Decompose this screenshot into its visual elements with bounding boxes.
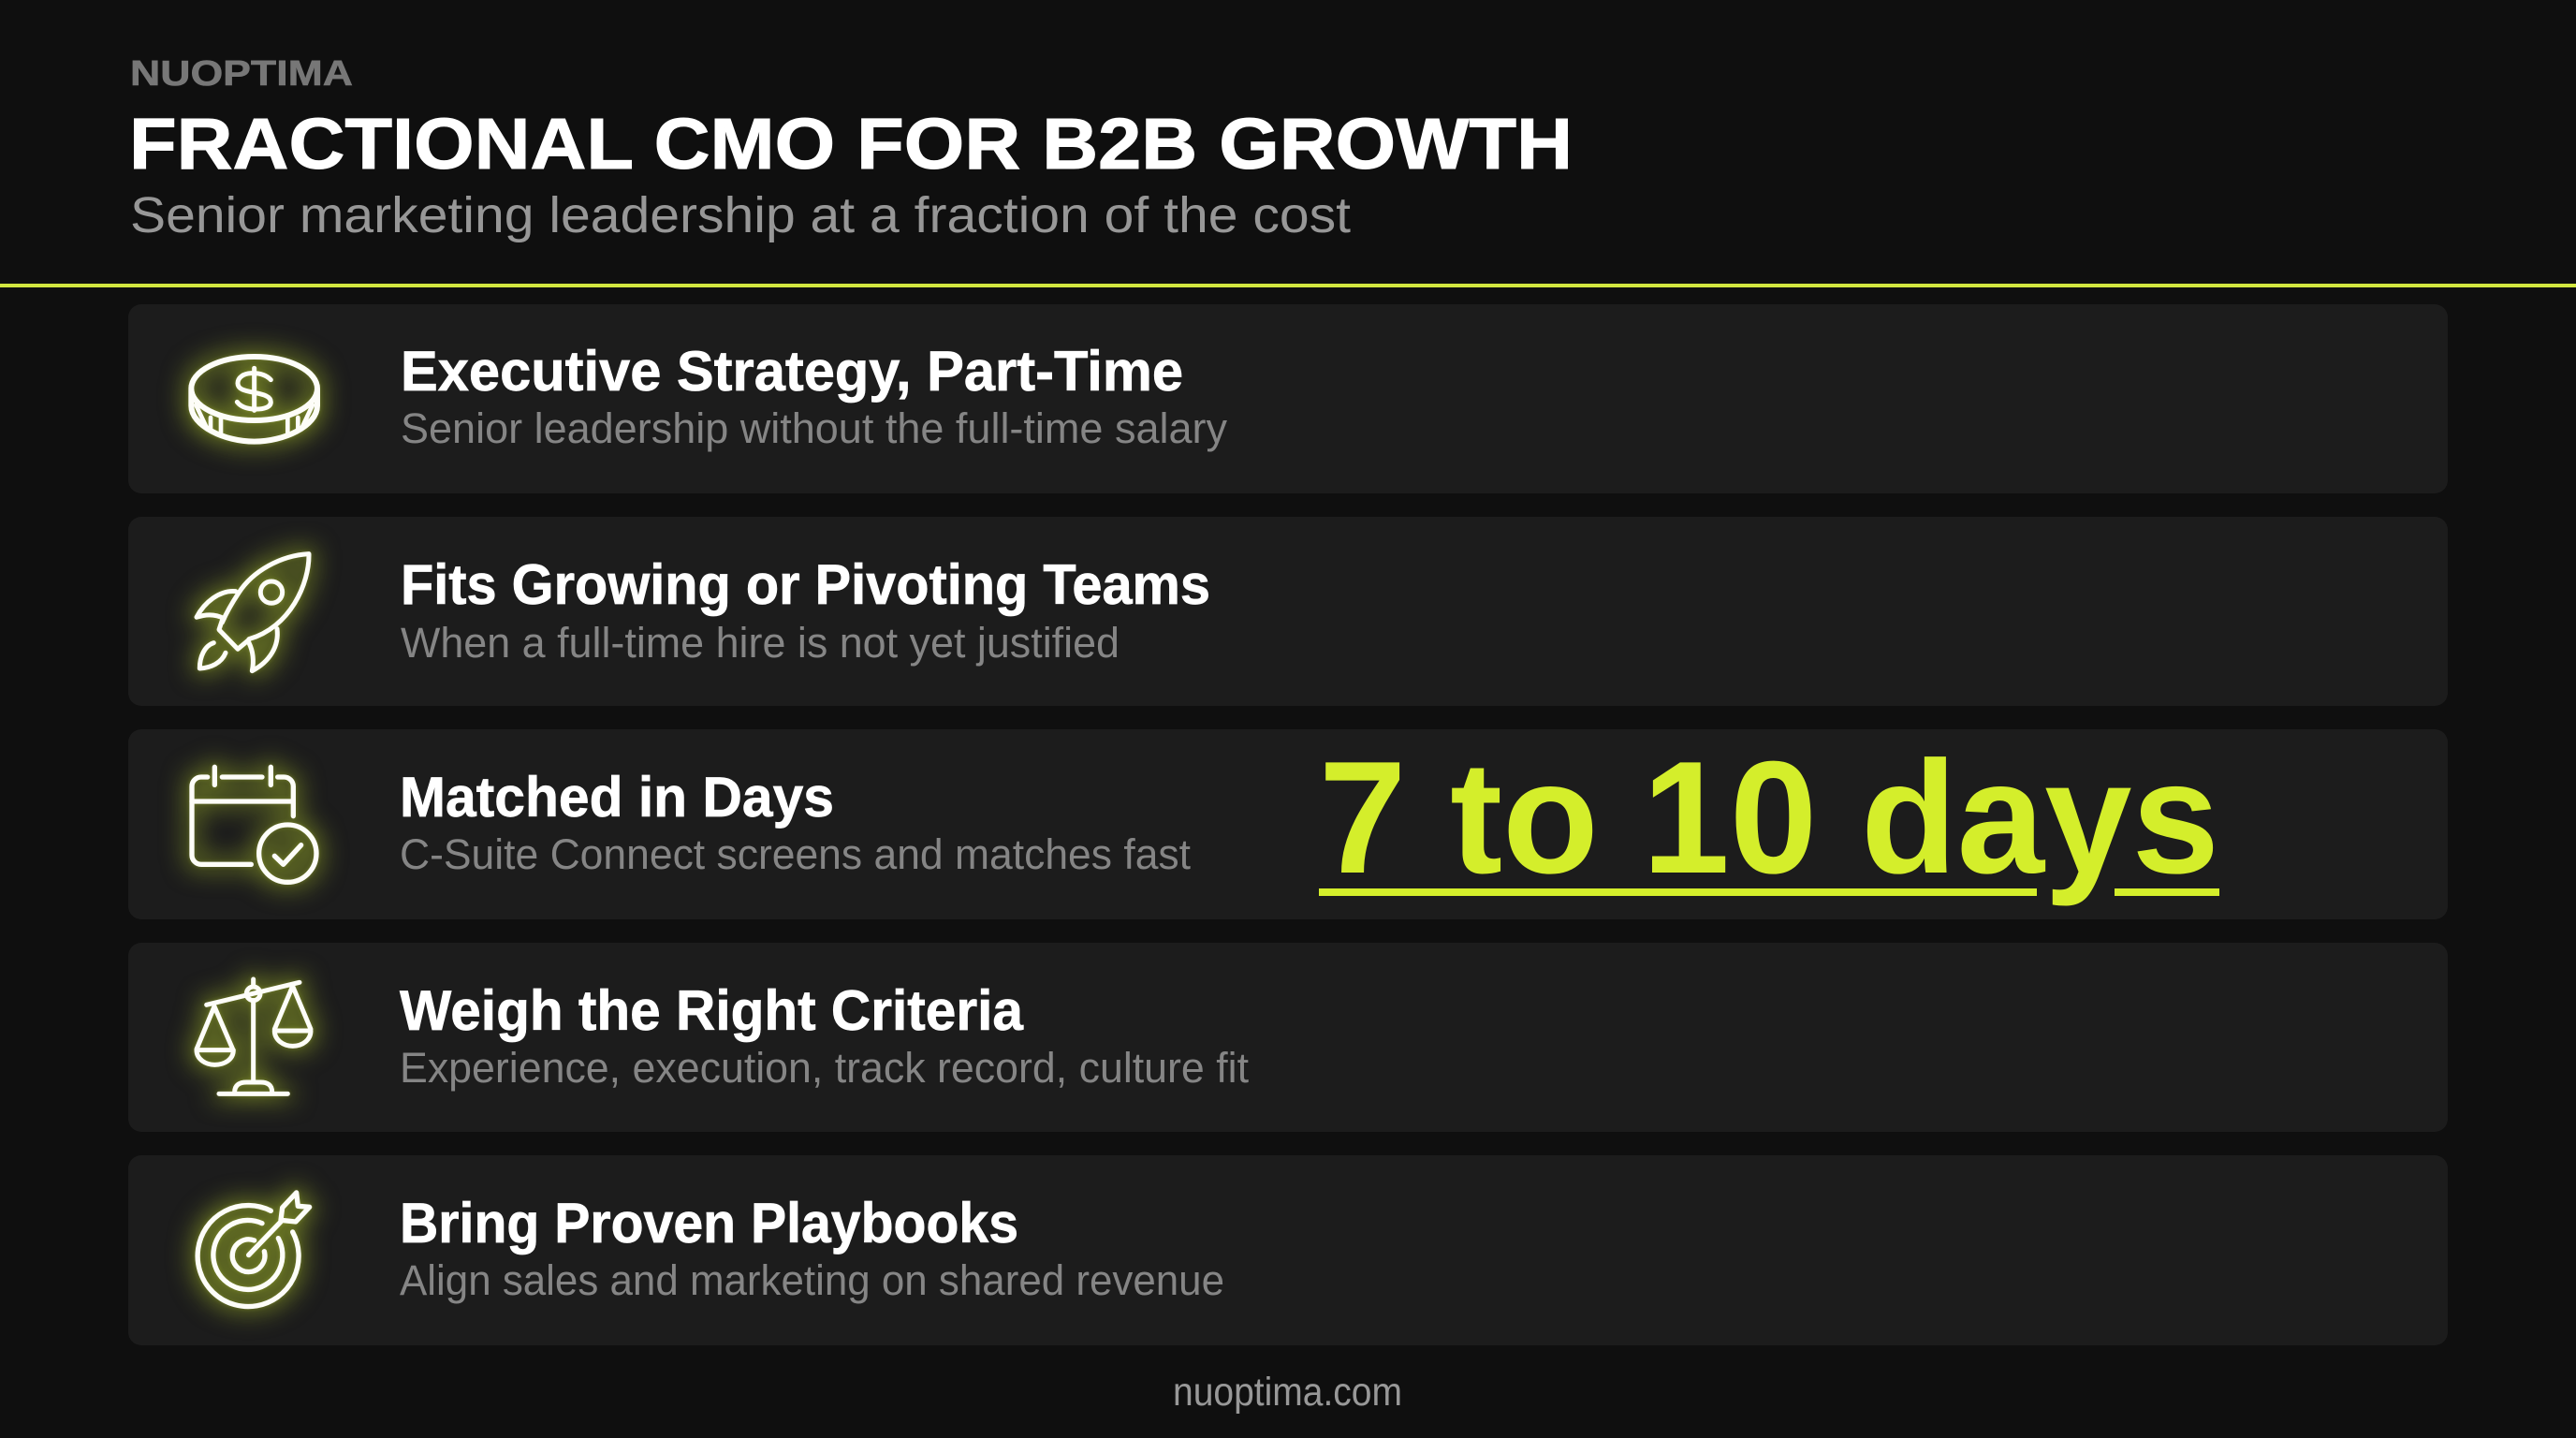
card heading: Executive Strategy, Part-Time xyxy=(401,340,1183,403)
icon: rocket xyxy=(197,554,309,671)
card description: C-Suite Connect screens and matches fast xyxy=(400,830,1191,878)
card description: When a full-time hire is not yet justified xyxy=(401,619,1120,667)
header xyxy=(129,54,1573,243)
brand name: NUOPTIMA xyxy=(130,54,353,94)
card description: Senior leadership without the full-time salary xyxy=(401,404,1227,452)
panel: executive strategy xyxy=(128,304,2448,493)
icon: calendar with check xyxy=(192,767,316,882)
card heading: Bring Proven Playbooks xyxy=(400,1192,1018,1255)
title: FRACTIONAL CMO FOR B2B GROWTH xyxy=(129,104,1573,184)
card heading: Matched in Days xyxy=(400,766,834,829)
panel: matched in days xyxy=(128,728,2448,919)
icon: balance scale xyxy=(197,979,311,1093)
panel: weigh the right criteria xyxy=(128,943,2448,1132)
callout: 7 to 10 days: 7 to 10 days xyxy=(1319,728,2219,907)
icon: target with arrow xyxy=(198,1193,310,1307)
panel: growing or pivoting teams xyxy=(128,517,2448,706)
card heading: Weigh the Right Criteria xyxy=(400,979,1024,1042)
icon: coin xyxy=(191,357,317,442)
card heading: Fits Growing or Pivoting Teams xyxy=(401,553,1210,616)
card description: Experience, execution, track record, culture fit xyxy=(400,1044,1249,1092)
card description: Align sales and marketing on shared revenue xyxy=(400,1256,1224,1304)
subtitle: Senior marketing leadership at a fraction of the cost xyxy=(130,187,1351,243)
panel: proven playbooks xyxy=(128,1155,2448,1345)
header divider line xyxy=(0,284,2576,287)
footer url: nuoptima.com xyxy=(1173,1370,1402,1415)
